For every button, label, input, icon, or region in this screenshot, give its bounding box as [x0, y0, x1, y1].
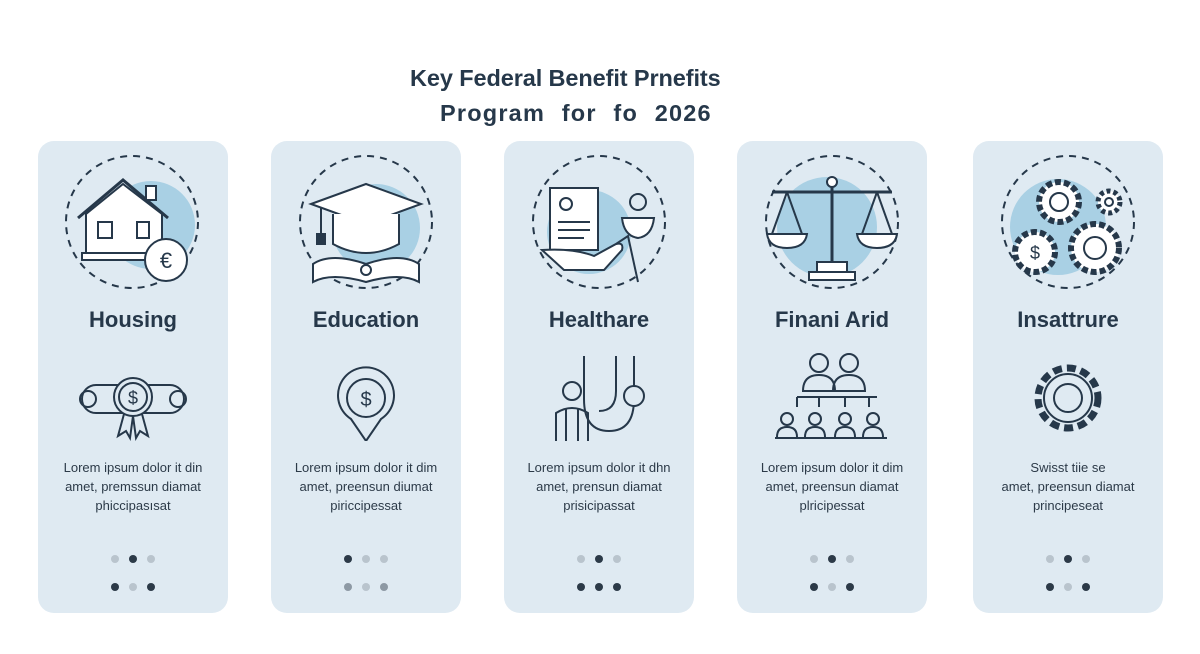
text block: Swisst tiie se [1030, 460, 1106, 475]
heading: Finani Arid [775, 307, 889, 332]
heading: Healthare [549, 307, 649, 332]
icon: house: € [160, 248, 172, 273]
text block: Lorem ipsum dolor it dhn [527, 460, 671, 475]
dots [344, 555, 388, 563]
text block: piriccipessat [330, 498, 402, 513]
text block: prisicipassat [563, 498, 635, 513]
panel: housing [38, 141, 228, 613]
panel: infrastructure [973, 141, 1163, 613]
text block: amet, premssun diamat [65, 479, 201, 494]
text block: principeseat [1033, 498, 1103, 513]
icon: team hierarchy [775, 354, 887, 438]
panel: education [271, 141, 461, 613]
icon: location dollar pin [338, 367, 394, 441]
text block: Lorem ipsum dolor it dim [295, 460, 437, 475]
title: Program for fo 2026 [440, 100, 712, 126]
icon: gears [1001, 155, 1135, 432]
icon: money badge [80, 378, 186, 438]
icon: gear [1038, 368, 1098, 428]
icon: location dollar pin: $ [360, 389, 372, 411]
text block [1002, 460, 1134, 513]
text block: amet, preensun diamat [1002, 479, 1134, 494]
icon: document in hand [532, 155, 666, 441]
text block: phiccipasısat [95, 498, 171, 513]
text block: amet, preensun diamat [766, 479, 898, 494]
title: Key Federal Benefit Prnefits [410, 65, 721, 91]
dots [577, 555, 621, 563]
icon: stethoscope doctor [556, 356, 644, 441]
icon: scales [765, 155, 899, 439]
icon: money badge: $ [128, 388, 138, 408]
heading: Education [313, 307, 419, 332]
text block: amet, preensun diumat [300, 479, 432, 494]
text block: Lorem ipsum dolor it dim [761, 460, 903, 475]
heading: Housing [89, 307, 177, 332]
dots [810, 555, 854, 563]
panel: healthcare [504, 141, 694, 613]
icon: graduation cap [299, 155, 433, 441]
dots [1046, 555, 1090, 563]
icon: gears: $ [1030, 243, 1040, 263]
icon: house [65, 155, 199, 441]
text block [64, 460, 202, 513]
text block: plricipessat [799, 498, 865, 513]
heading: Insattrure [1017, 307, 1119, 332]
text block [761, 460, 903, 513]
text block: Lorem ipsum dolor it din [64, 460, 202, 475]
dots [111, 555, 155, 563]
text block: amet, prensun diamat [536, 479, 662, 494]
text block [295, 460, 437, 513]
panel: financial aid [737, 141, 927, 613]
title [410, 65, 721, 126]
text block [527, 460, 671, 513]
